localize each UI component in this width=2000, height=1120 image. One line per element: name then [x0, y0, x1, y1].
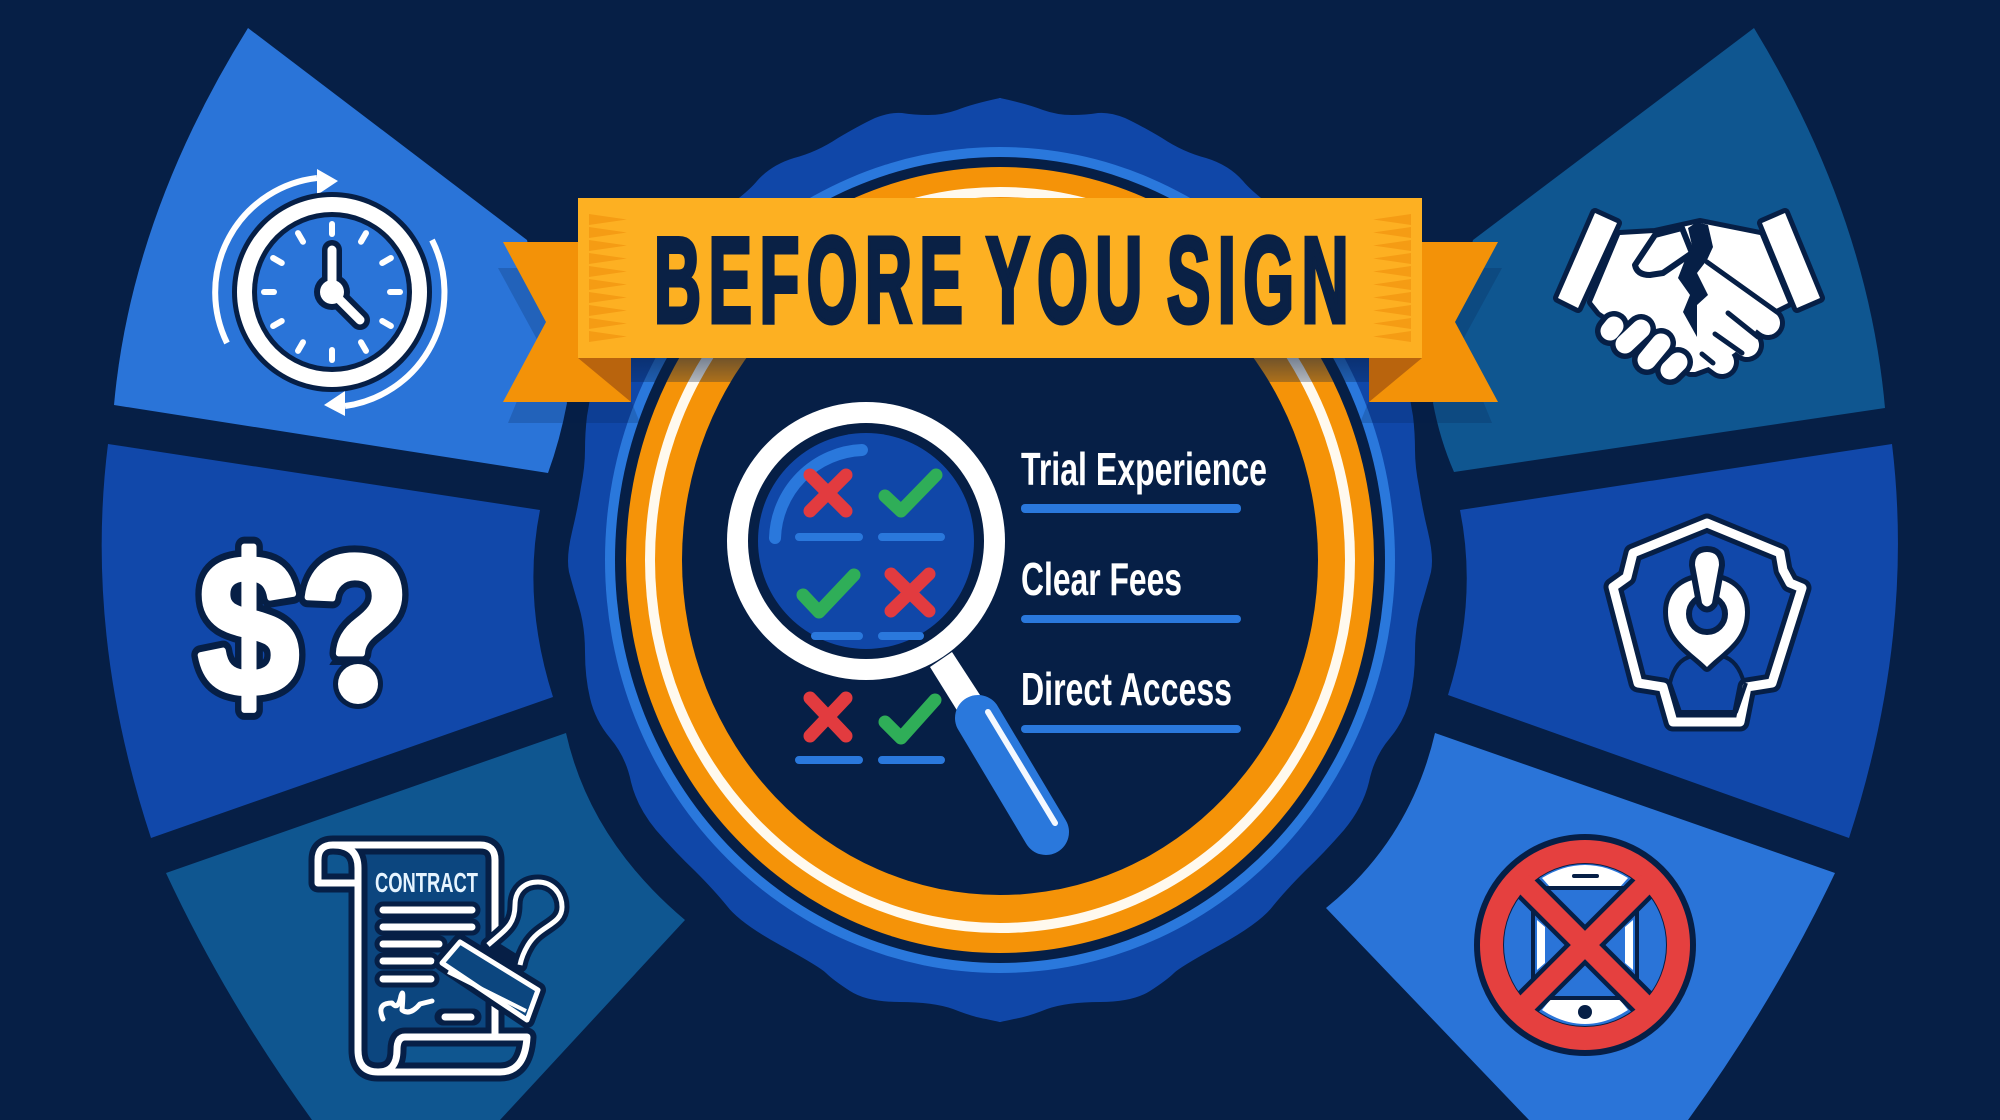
glass neck	[930, 652, 980, 712]
question mark dot outline	[333, 659, 383, 709]
clock rim	[237, 197, 427, 387]
person shoulders	[1670, 656, 1746, 712]
lens	[758, 433, 974, 649]
text lines halo	[383, 910, 473, 1017]
red cross	[1522, 882, 1648, 1008]
arrowheads	[317, 169, 345, 416]
banner shadow	[631, 358, 1369, 382]
ribbon shadow right	[1360, 268, 1502, 423]
icon: clock with arrows	[215, 169, 444, 416]
white ring	[645, 187, 1355, 933]
shield halo	[1613, 523, 1802, 722]
orange ring	[626, 167, 1374, 953]
ribbon shadow left	[498, 268, 640, 423]
ribbon banner title	[498, 198, 1502, 423]
hands body	[1592, 223, 1788, 372]
right hand fingers	[1702, 293, 1768, 362]
left cuff	[1558, 213, 1617, 308]
fingers halo	[1610, 326, 1678, 370]
cycle arrow arcs	[215, 178, 444, 406]
clock face	[257, 217, 407, 367]
page interior	[358, 850, 488, 1065]
phone top	[1542, 865, 1628, 887]
finger creases	[1702, 262, 1777, 363]
scalloped seal, right half	[999, 98, 1432, 1022]
hands	[332, 250, 360, 320]
cross outline	[1522, 882, 1648, 1008]
scroll halo	[318, 845, 527, 1072]
phone speaker	[1574, 874, 1597, 878]
right fold	[1369, 358, 1422, 402]
right hand fingers halo	[1702, 293, 1768, 362]
label: clear fees: Clear Fees	[1021, 553, 1182, 605]
right tail	[1369, 242, 1498, 402]
stamp body halo	[442, 942, 538, 1020]
phone outline	[1533, 888, 1637, 998]
glass dark edge	[748, 423, 984, 659]
stamp body outline	[442, 942, 538, 1020]
handle highlight	[988, 712, 1055, 823]
text lines	[383, 910, 472, 1017]
panel: bottom left wedge	[166, 733, 685, 1120]
panel: middle right wedge	[1448, 444, 1898, 838]
scroll	[318, 845, 527, 1072]
icon: shield with power pin	[1613, 523, 1802, 722]
underline 1	[1021, 504, 1241, 513]
panel: bottom right wedge	[1326, 733, 1835, 1120]
phone button	[1578, 1005, 1592, 1019]
signature	[381, 993, 432, 1019]
pin	[1668, 578, 1745, 667]
central seal badge	[568, 98, 1432, 1022]
hub	[320, 280, 344, 304]
prohibition outer outline	[1477, 837, 1693, 1053]
fingers	[1610, 326, 1678, 370]
panel: top right wedge	[1433, 28, 1885, 472]
panel: top left wedge	[114, 28, 567, 473]
icon: contract with stamp	[318, 845, 562, 1072]
clock ticks	[264, 224, 400, 360]
hands outline	[332, 250, 360, 320]
thumb	[1635, 228, 1692, 275]
label: trial experience: Trial Experience	[1021, 443, 1267, 495]
underline 3	[1021, 725, 1241, 733]
dark gap ring	[615, 157, 1385, 963]
question mark dot	[338, 664, 378, 704]
glass rim	[727, 402, 1005, 680]
stamp band	[448, 972, 526, 1011]
left fold	[578, 358, 631, 402]
phone left side	[1537, 920, 1545, 970]
green checks	[803, 475, 936, 738]
icon: dollar and question mark	[198, 515, 410, 738]
inner dark disc	[682, 225, 1318, 895]
prohibition inner outline	[1501, 861, 1669, 1029]
phone right side	[1625, 920, 1633, 970]
row lines	[799, 537, 941, 760]
right cuff	[1762, 213, 1820, 308]
panel: middle left wedge	[102, 444, 553, 838]
inner orange ring	[655, 197, 1345, 923]
power hole	[1689, 596, 1725, 632]
question mark dot cover	[326, 665, 390, 715]
stamp handle halo	[488, 882, 562, 965]
shield outline	[1613, 523, 1802, 722]
contract heading: CONTRACT	[375, 867, 478, 898]
magnifying glass with checklist	[727, 402, 1055, 832]
phone bottom	[1542, 1000, 1628, 1024]
left tail	[503, 242, 631, 402]
label: direct access: Direct Access	[1021, 663, 1232, 715]
hub outline	[314, 274, 350, 310]
underline 2	[1021, 615, 1241, 623]
banner body	[578, 198, 1422, 358]
scalloped seal, left half	[568, 98, 1001, 1022]
icon: broken handshake	[1558, 213, 1820, 372]
lens highlight	[775, 450, 862, 538]
clock outline	[232, 192, 432, 392]
title: BEFORE YOU SIGN	[654, 212, 1356, 348]
label list	[1021, 443, 1267, 733]
right zigzag decoration	[1373, 213, 1411, 343]
crack	[1678, 222, 1713, 337]
power toggle	[1695, 552, 1719, 606]
stamp handle	[488, 882, 562, 965]
handle	[978, 718, 1046, 832]
outline layer: $?	[198, 515, 410, 738]
light blue ring	[605, 147, 1395, 973]
clock dark inner	[252, 212, 412, 372]
prohibition ring	[1491, 851, 1679, 1039]
red crosses	[810, 475, 929, 736]
white layer: $?	[198, 515, 410, 738]
icon: no phones	[1477, 837, 1693, 1053]
left zigzag decoration	[589, 213, 627, 343]
